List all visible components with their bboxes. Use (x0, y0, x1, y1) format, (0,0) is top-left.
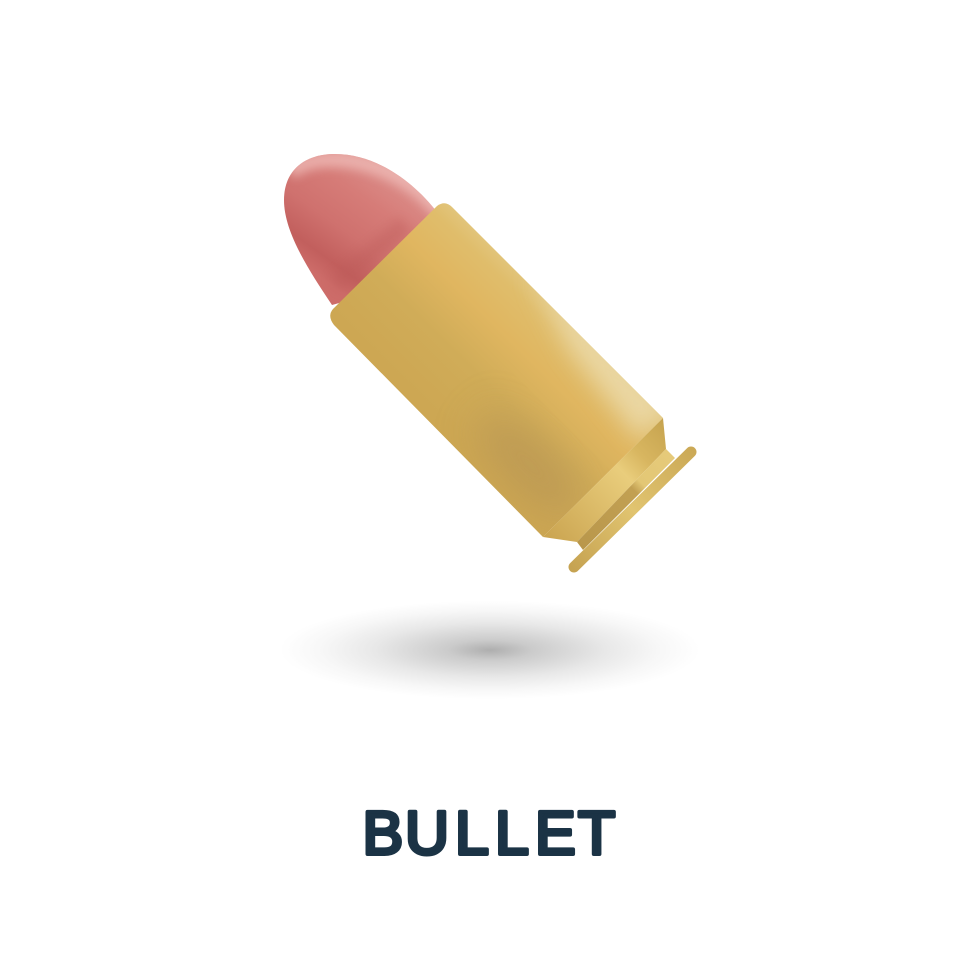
rim (574, 452, 691, 567)
case neck (543, 418, 666, 542)
infographic: bullet icon (284, 154, 696, 856)
cartridge case (330, 203, 691, 567)
bullet tip (284, 154, 434, 305)
ground shadow (278, 600, 702, 700)
extractor groove (577, 449, 675, 550)
title: BULLET (362, 799, 615, 867)
bullet illustration (275, 145, 691, 567)
